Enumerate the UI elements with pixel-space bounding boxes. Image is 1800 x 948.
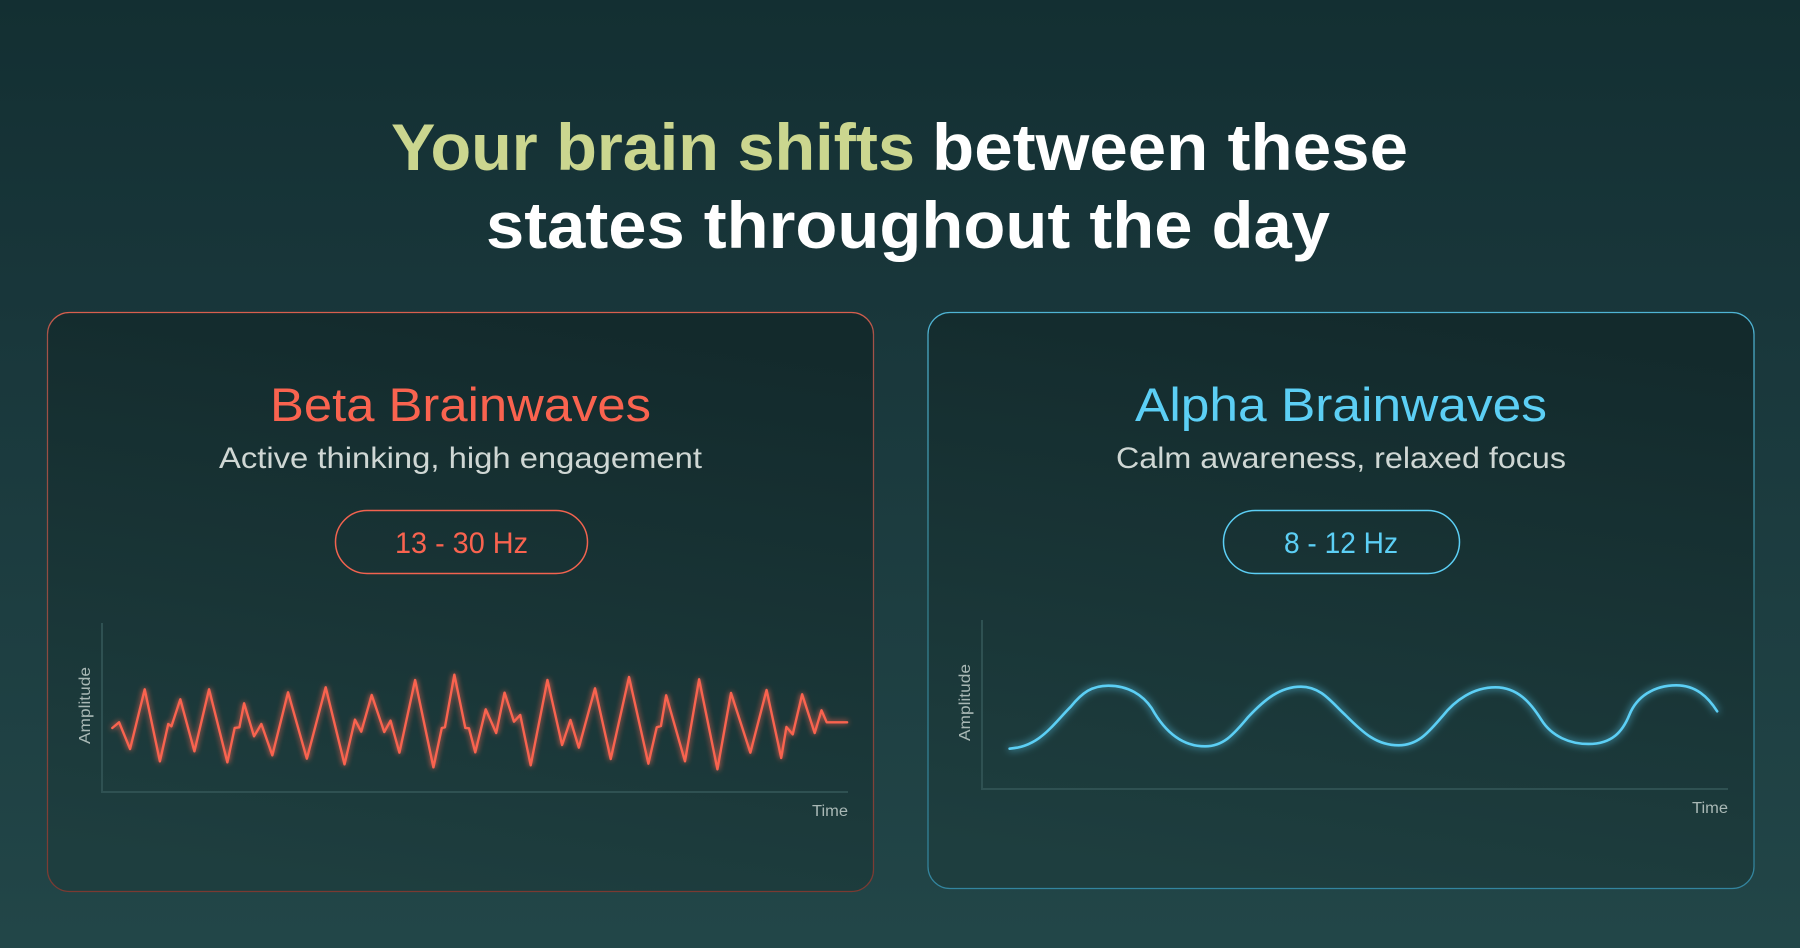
title: states throughout the day [486,188,1330,262]
panel: beta brainwaves [48,312,874,892]
axes [982,620,1728,789]
y-axis label: Amplitude [77,667,94,744]
panel: alpha brainwaves [928,312,1754,888]
heading: alpha: Alpha Brainwaves [1135,378,1547,431]
title: Your brain shifts [391,110,915,184]
title [391,110,1408,262]
title: between these [932,110,1408,184]
frequency pill: beta: 13 - 30 Hz [395,527,528,560]
frequency pill: alpha [1224,510,1460,574]
frequency pill: alpha: 8 - 12 Hz [1284,527,1398,560]
axes [102,623,848,792]
subtitle: alpha: Calm awareness, relaxed focus [1116,442,1566,475]
subtitle: beta: Active thinking, high engagement [219,442,703,475]
y-axis label: Amplitude [957,664,974,741]
heading: beta: Beta Brainwaves [270,378,651,431]
x-axis label: Time [812,803,848,820]
x-axis label: Time [1692,800,1728,817]
wave line [112,675,847,769]
card background [48,312,874,892]
card background [928,312,1754,888]
wave line [1010,685,1717,749]
chart: alpha wave [957,620,1728,817]
chart: beta wave [77,623,848,820]
frequency pill: beta [336,510,588,574]
